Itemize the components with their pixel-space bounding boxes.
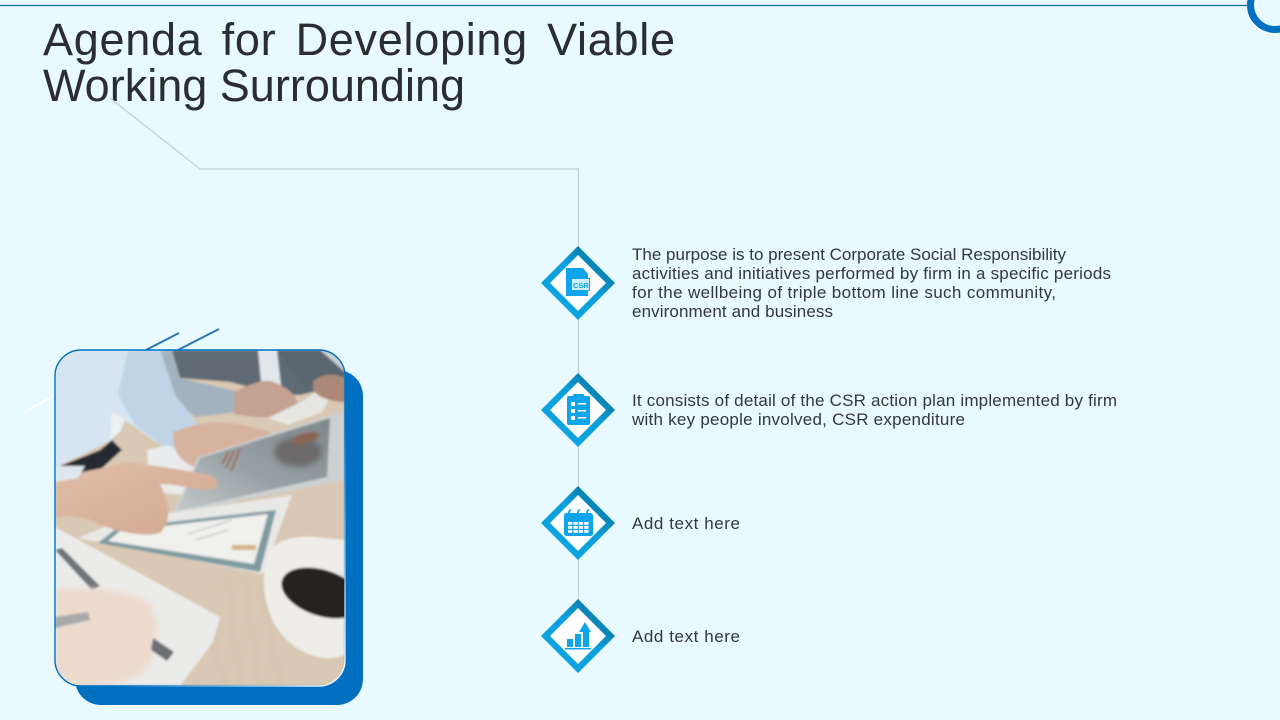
gap beside arm [110,412,125,440]
icon: rising bar chart diamond [541,599,615,673]
text block 3: Add text here [632,514,740,533]
document frame [98,510,276,572]
dark gap under arm [60,439,123,474]
timeline item 1 [541,245,1111,321]
text block 2: It consists of detail of the CSR action plan implemented by firm [632,391,1117,410]
left shirt [56,350,162,467]
front hand on tablet [173,423,272,467]
timeline item 2 [541,373,1117,447]
coffee [280,566,344,620]
right hand [313,375,345,402]
writing hand [55,588,157,686]
back person sleeve [160,350,240,417]
icon: clipboard checklist diamond [541,373,615,447]
front papers [55,527,220,686]
photo: business meeting at table [55,350,369,686]
table wood [55,350,345,686]
timeline item 4 [541,599,740,673]
paper under hand [147,445,200,495]
connector line from title to timeline [110,98,578,636]
text block 1: environment and business [632,302,833,321]
timeline item 3 [541,486,740,560]
tablet screen [177,418,330,511]
photo shadow card [75,370,363,705]
top rule line [0,4,1250,6]
tablet frame [173,411,345,514]
text block 2: with key people involved, CSR expenditure [631,410,965,429]
back person hand [234,381,298,418]
icon: calendar diamond [541,486,615,560]
text block 1: for the wellbeing of triple bottom line such community, [632,283,1056,302]
papers back right [268,390,333,425]
title: Working Surrounding [43,60,465,111]
back person suit [170,350,345,395]
title: Agenda for Developing Viable [43,14,675,65]
text block 2 [631,391,1117,429]
text block 1 [632,245,1111,321]
photo accent lines [26,329,219,411]
title [43,14,675,111]
text block 4: Add text here [632,627,740,646]
pen [55,548,100,590]
text block 1: activities and initiatives performed by firm in a specific periods [632,264,1111,283]
corner ring [1250,0,1280,30]
icon: CSR document diamond [541,246,615,320]
pointing hand [55,462,217,535]
text block 1: The purpose is to present Corporate Social Responsibility [632,245,1066,264]
outer document [78,495,292,574]
coffee cup [264,537,345,658]
icon: CSR document diamond: CSR [573,281,589,290]
